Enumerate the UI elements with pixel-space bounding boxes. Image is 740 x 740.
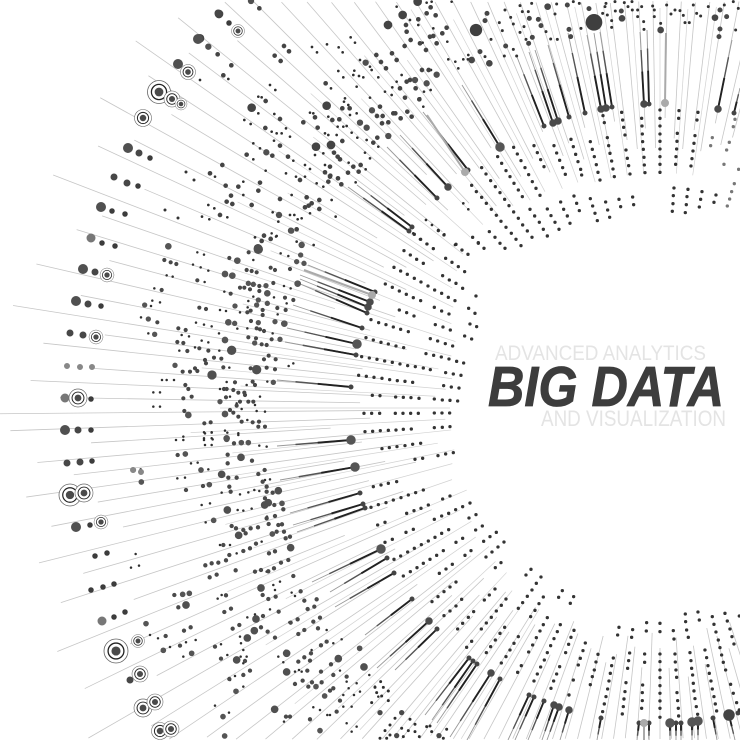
gray data rays: [304, 33, 666, 740]
lower band cluster: [131, 433, 378, 736]
thick data rays: faint full length: [277, 30, 740, 740]
outer solid node dots: [65, 13, 229, 680]
thick ray end dots: [351, 103, 738, 723]
left scatter extras: [165, 172, 194, 218]
inner dot rows: left and upper left: [359, 231, 478, 459]
secondary radial rays: [191, 7, 716, 739]
top arc cluster: [472, 2, 738, 63]
subtitle line one: ADVANCED ANALYTICS: [495, 342, 706, 365]
left band cluster: [141, 231, 304, 438]
outer concentric ring nodes: [59, 24, 244, 740]
thick data rays: dark inner section: [277, 30, 740, 740]
title: big data: [488, 342, 726, 431]
thick data rays: mid section: [277, 30, 740, 740]
inner dot rows: bottom: [371, 482, 739, 738]
upper cluster: [200, 1, 468, 248]
inner dot rows: top: [472, 110, 739, 248]
